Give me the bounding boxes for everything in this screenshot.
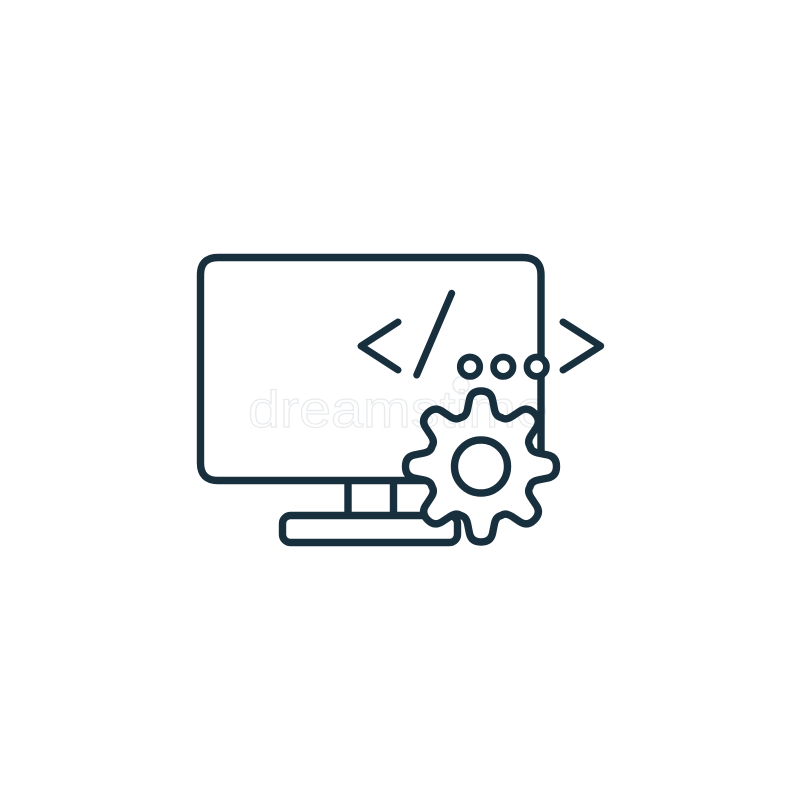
gear outline — [406, 391, 556, 542]
three dots — [460, 357, 546, 376]
monitor right edge — [537, 372, 545, 452]
monitor stand — [282, 482, 458, 542]
watermark: dreamstime — [248, 381, 548, 439]
gear background — [406, 391, 556, 542]
monitor screen — [200, 258, 541, 480]
code brackets and slash — [361, 293, 601, 375]
